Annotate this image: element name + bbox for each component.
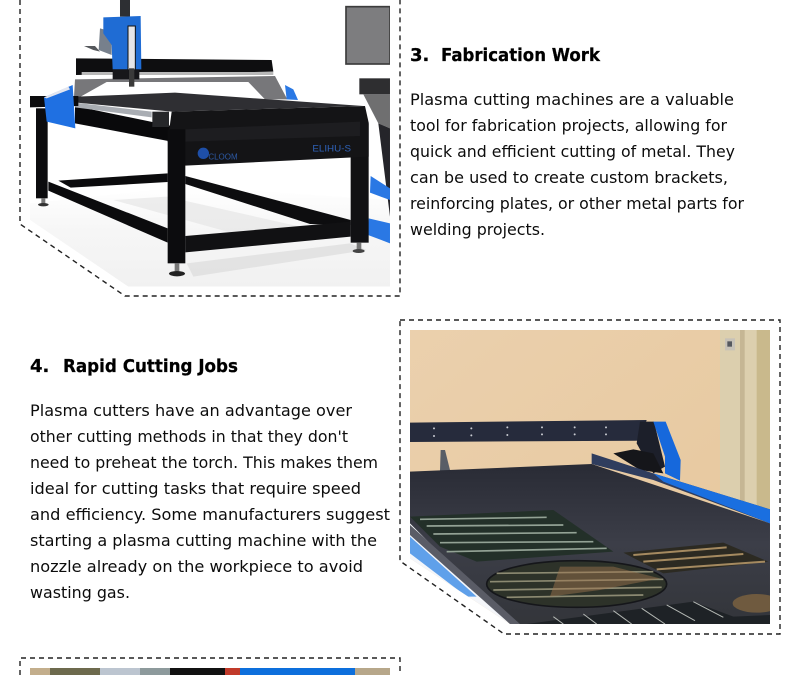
heading: section 4: 4.: [30, 356, 49, 377]
text block: fabrication work description: tool for fabrication projects, allowing for: [410, 116, 727, 135]
panel: rapid cutting photo: [400, 320, 781, 634]
illustration: plasma cutting table: CLOOM: [208, 152, 238, 161]
text block: fabrication work description: Plasma cutting machines are a valuable: [410, 90, 734, 109]
text block: rapid cutting jobs description: wasting gas.: [30, 583, 130, 602]
heading: section 3: 3.: [410, 45, 429, 66]
text block: rapid cutting jobs description: Plasma cutters have an advantage over: [30, 401, 352, 420]
text block: rapid cutting jobs description: starting a plasma cutting machine with the: [30, 531, 377, 550]
text block: fabrication work description: quick and efficient cutting of metal. They: [410, 142, 735, 161]
text block: fabrication work description: [410, 90, 744, 239]
illustration: plasma cutting table: ELIHU-S: [312, 144, 351, 154]
text block: fabrication work description: can be used to create custom brackets,: [410, 168, 728, 187]
text block: fabrication work description: reinforcing plates, or other metal parts for: [410, 194, 744, 213]
text block: rapid cutting jobs description: and efficiency. Some manufacturers suggest: [30, 505, 390, 524]
panel: next section photo (cropped): [20, 658, 400, 675]
dashed frame: next photo: [20, 658, 400, 675]
illustration: cutting table with grate cut-outs: [410, 330, 781, 624]
photo strip: workshop: [30, 668, 390, 675]
text block: fabrication work description: welding projects.: [410, 220, 545, 239]
heading: section 3: Fabrication Work: [441, 45, 601, 66]
text block: rapid cutting jobs description: ideal for cutting tasks that require speed: [30, 479, 361, 498]
illustration: plasma cutting table: [30, 0, 390, 287]
text block: rapid cutting jobs description: other cutting methods in that they don't: [30, 427, 348, 446]
text block: rapid cutting jobs description: [30, 401, 390, 602]
heading: section 4: Rapid Cutting Jobs: [63, 356, 238, 377]
text block: rapid cutting jobs description: nozzle already on the workpiece to avoid: [30, 557, 363, 576]
text block: rapid cutting jobs description: need to preheat the torch. This makes them: [30, 453, 378, 472]
panel: fabrication machine photo: [20, 0, 400, 296]
dashed frame: machine photo: [20, 0, 400, 296]
dashed frame: rapid cutting photo: [400, 320, 780, 634]
